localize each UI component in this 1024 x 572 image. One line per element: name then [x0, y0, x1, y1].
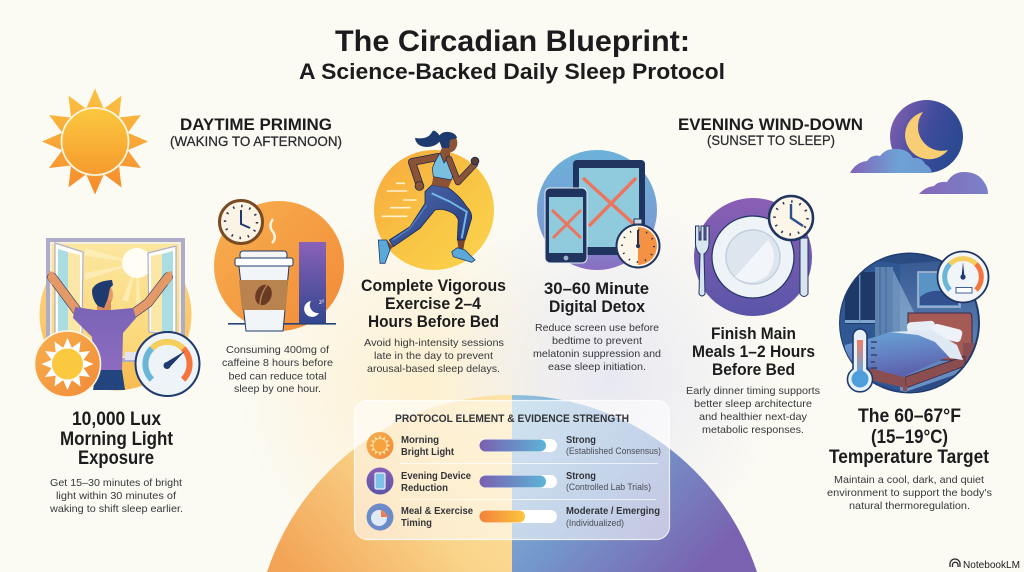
text: 10,000 lux: 10,000 Lux — [72, 409, 161, 430]
text: temperature target: environment to support the body's — [827, 487, 992, 499]
text: exercise: arousal-based sleep delays. — [367, 363, 500, 375]
title: The Circadian Blueprint: — [335, 25, 690, 58]
fork — [696, 226, 709, 296]
text: finish meals: Meals 1–2 Hours — [692, 342, 815, 361]
illustration: devices with crosses — [537, 150, 660, 270]
row: morning bright light: Bright Light — [401, 446, 454, 458]
bed — [845, 313, 979, 393]
row: meal and exercise timing: Moderate / Emerging — [566, 505, 660, 517]
sleep bar — [299, 242, 326, 324]
text: exercise: Hours Before Bed — [368, 313, 499, 331]
row: meal and exercise timing: (Individualized) — [566, 518, 624, 529]
icon: moon and clouds — [850, 100, 988, 194]
icon: thermometer — [848, 329, 877, 392]
title — [299, 25, 725, 84]
illustration: runner — [374, 131, 494, 270]
text: 10,000 lux: Exposure — [78, 448, 154, 469]
left sash — [55, 243, 83, 338]
text: caffeine: sleep by one hour. — [234, 383, 321, 395]
text: 10,000 lux: waking to shift sleep earlier. — [49, 503, 183, 515]
icon: lux gauge — [136, 332, 200, 396]
tablet — [573, 160, 645, 255]
text: exercise: Complete Vigorous — [361, 277, 506, 295]
text: digital detox: Reduce screen use before — [535, 322, 659, 334]
row: morning bright light: Strong — [566, 434, 596, 446]
icon: clock — [220, 200, 262, 244]
heading: daytime priming: DAYTIME PRIMING — [180, 115, 332, 134]
text: temperature target: Maintain a cool, dark, and quiet — [834, 474, 984, 486]
row: evening device reduction: (Controlled Lab Trials) — [566, 482, 651, 493]
text: temperature target — [827, 406, 992, 512]
text: finish meals: metabolic responses. — [702, 424, 804, 436]
text: 10,000 lux — [49, 409, 183, 515]
runner figure — [378, 131, 479, 263]
row: morning bright light: Morning — [401, 434, 439, 446]
row: meal and exercise timing: Meal & Exercise — [401, 505, 473, 517]
text: finish meals: Finish Main — [711, 324, 796, 343]
row: morning bright light: (Established Consensus) — [566, 446, 661, 457]
illustration: person at sunny window — [34, 238, 200, 397]
text: caffeine: caffeine 8 hours before — [222, 357, 333, 369]
row: evening device reduction: Strong — [566, 470, 596, 482]
text: caffeine: bed can reduce total — [228, 370, 326, 382]
central day-night semicircle — [267, 395, 757, 572]
text: temperature target: (15–19°C) — [871, 427, 948, 448]
text: temperature target: natural thermoregulation. — [849, 500, 970, 512]
text: digital detox: Digital Detox — [549, 297, 645, 316]
text: temperature target: Temperature Target — [829, 447, 990, 468]
text: digital detox — [533, 279, 661, 373]
row: meal and exercise timing — [366, 504, 660, 530]
icon: large sun — [42, 88, 148, 194]
text: exercise: Exercise 2–4 — [385, 295, 482, 313]
row: evening device reduction — [366, 468, 651, 494]
heading: evening wind-down — [678, 115, 863, 148]
text: 10,000 lux: light within 30 minutes of — [56, 490, 176, 502]
icon: sun badge — [34, 331, 100, 397]
text: exercise: Avoid high-intensity sessions — [364, 337, 504, 349]
text: exercise: late in the day to prevent — [374, 350, 493, 362]
heading: daytime priming: (WAKING TO AFTERNOON) — [170, 133, 342, 149]
heading: evening wind-down: (SUNSET TO SLEEP) — [707, 132, 835, 148]
table line — [228, 323, 336, 325]
text: caffeine: Consuming 400mg of — [226, 344, 329, 356]
title: A Science-Backed Daily Sleep Protocol — [299, 59, 725, 84]
speed lines — [382, 183, 417, 216]
illustration: coffee cup and sleep bar — [214, 200, 344, 331]
watermark: NotebookLM: NotebookLM — [963, 560, 1020, 571]
text: digital detox: melatonin suppression and — [533, 348, 661, 360]
person — [48, 271, 172, 390]
text: 10,000 lux: Morning Light — [60, 429, 174, 450]
text: finish meals: Before Bed — [712, 360, 795, 379]
text: finish meals: Early dinner timing supports — [686, 385, 820, 397]
icon: stopwatch — [616, 219, 660, 268]
illustration: cool bedroom — [839, 252, 988, 394]
window frame — [48, 240, 183, 360]
panel: evidence strength — [354, 400, 670, 540]
text: exercise — [361, 277, 506, 375]
plate — [712, 216, 794, 298]
panel heading: PROTOCOL ELEMENT & EVIDENCE STRENGTH — [395, 413, 629, 425]
row: morning bright light — [366, 432, 661, 459]
icon: clock — [769, 196, 813, 240]
row: evening device reduction: Evening Device — [401, 470, 471, 482]
illustration: plate with clock — [694, 196, 813, 316]
text: digital detox: ease sleep initiation. — [548, 361, 646, 373]
heading: daytime priming — [170, 115, 342, 149]
text: digital detox: 30–60 Minute — [544, 279, 649, 298]
illustration: coffee cup and sleep bar: z² — [319, 300, 324, 306]
knife — [800, 238, 808, 296]
text: caffeine — [222, 344, 333, 395]
text: finish meals — [686, 324, 820, 436]
heading: evening wind-down: EVENING WIND-DOWN — [678, 115, 863, 134]
text: 10,000 lux: Get 15–30 minutes of bright — [50, 477, 182, 489]
steam — [270, 219, 275, 243]
row: evening device reduction: Reduction — [401, 482, 448, 494]
coffee cup — [235, 251, 293, 331]
text: finish meals: better sleep architecture — [694, 398, 812, 410]
row: meal and exercise timing: Timing — [401, 517, 432, 529]
text: finish meals: and healthier next-day — [699, 411, 808, 423]
text: temperature target: The 60–67°F — [858, 406, 961, 427]
right sash — [148, 246, 176, 335]
text: digital detox: bedtime to prevent — [552, 335, 642, 347]
icon: temperature gauge — [938, 252, 988, 302]
phone — [545, 188, 587, 263]
